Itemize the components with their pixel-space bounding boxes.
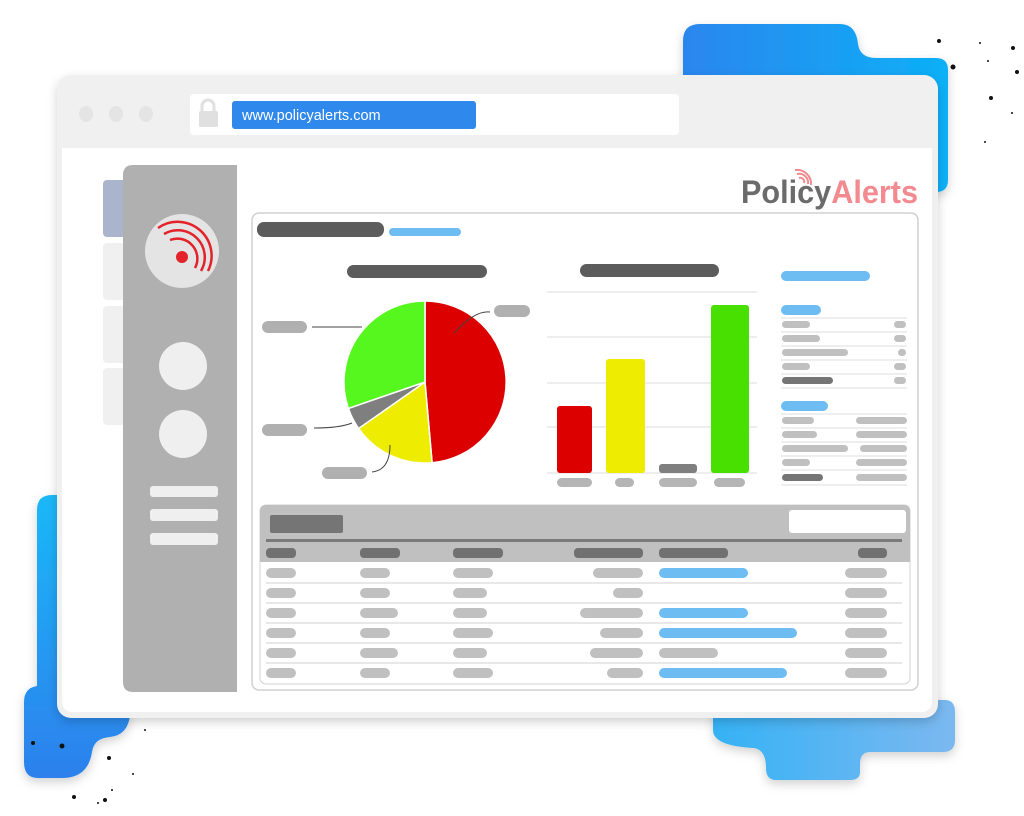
bar chart xyxy=(547,264,757,487)
address bar xyxy=(190,94,679,135)
address bar: www.policyalerts.com xyxy=(241,108,381,124)
browser dots xyxy=(79,106,153,122)
blue shape: bottom right xyxy=(713,700,955,780)
logo: PolicyAlerts xyxy=(741,174,918,210)
blue shape: top right xyxy=(683,24,948,192)
stats list xyxy=(781,271,907,485)
main panel xyxy=(252,213,918,690)
data table xyxy=(260,505,910,684)
pie chart xyxy=(262,265,530,479)
side tabs xyxy=(103,180,129,425)
icon: alert signal xyxy=(145,214,219,288)
browser window xyxy=(57,75,938,718)
blue shape: bottom left xyxy=(24,495,130,778)
sidebar xyxy=(123,165,237,692)
panel title xyxy=(257,222,384,237)
icon: lock xyxy=(199,100,218,127)
